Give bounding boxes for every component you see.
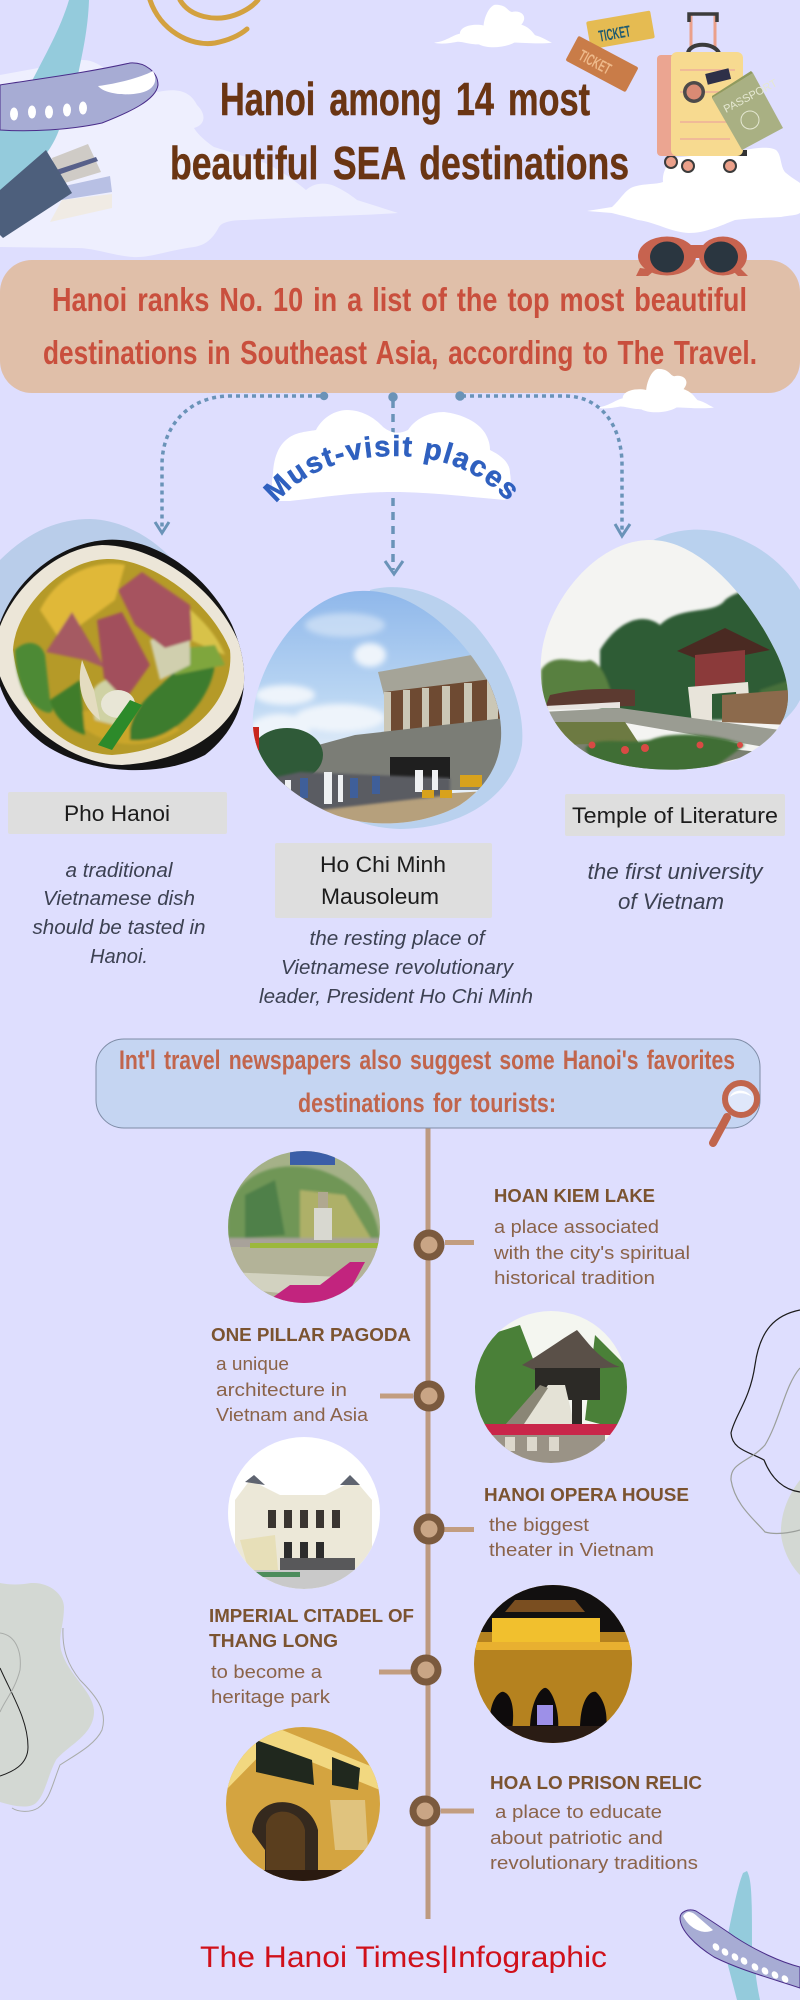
title: beautiful SEA destinations: [170, 137, 629, 189]
text: mausoleum description: leader, President Ho Chi Minh: [259, 986, 533, 1008]
yellow ticket: [586, 10, 655, 49]
dashed arrow centre: [385, 394, 403, 574]
text: Pho Hanoi description: a traditional: [66, 860, 173, 882]
text: Hoan Kiem Lake: a place associated: [494, 1217, 659, 1237]
text: mausoleum description: [259, 928, 533, 1008]
panel: Temple of Literature: [530, 530, 800, 778]
text: Hanoi Opera House: [484, 1485, 689, 1560]
label: Temple of Literature: Temple of Literature: [572, 803, 778, 828]
orange ticket: TICKET: [576, 47, 614, 78]
node: Imperial Citadel: [379, 1654, 442, 1686]
text: Hoan Kiem Lake: with the city's spiritual: [493, 1243, 690, 1263]
plane fuselage: [0, 63, 158, 131]
photo: Hoa Lo Prison: [224, 1725, 384, 1885]
panel: Ho Chi Minh Mausoleum: [245, 585, 522, 835]
text: One Pillar Pagoda: a unique: [216, 1354, 289, 1374]
must-visit cloud: [262, 410, 516, 502]
text: Hoan Kiem Lake: HOAN KIEM LAKE: [494, 1186, 655, 1206]
timeline vertical line: [426, 1128, 430, 1919]
must-visit heading: Must-visit places: [262, 434, 516, 502]
text: Pho Hanoi description: Hanoi.: [90, 946, 148, 968]
plane windows: [10, 102, 87, 120]
text: Hoa Lo Prison Relic: a place to educate: [495, 1802, 662, 1822]
suitcase wheels: [665, 156, 736, 172]
decorative blob left: [0, 1583, 103, 1811]
photo: pho bowl: [0, 536, 255, 776]
footer credit: The Hanoi Times|Infographic: [200, 1941, 607, 1974]
photo: Hoan Kiem Lake: [225, 1148, 385, 1308]
orange ticket: [565, 36, 639, 92]
text: Imperial Citadel: to become a: [211, 1662, 323, 1682]
passport green: [712, 71, 783, 150]
yellow ticket: TICKET: [597, 23, 632, 46]
label: Pho Hanoi: [8, 792, 227, 834]
small white cloud top: [434, 5, 552, 47]
text: Hanoi Opera House: HANOI OPERA HOUSE: [484, 1485, 689, 1505]
text: One Pillar Pagoda: [211, 1325, 411, 1425]
text: One Pillar Pagoda: Vietnam and Asia: [216, 1405, 369, 1425]
plane upper wing: [30, 0, 89, 85]
text: Hanoi Opera House: the biggest: [489, 1515, 589, 1535]
decorative gold swirl: [150, 0, 258, 44]
big white cloud right: [587, 148, 800, 233]
heading bar: destinations for tourists:: [298, 1088, 556, 1118]
photo: mausoleum: [253, 590, 502, 824]
text: temple description: [588, 859, 765, 914]
passport dark: [0, 150, 72, 238]
text: Hoa Lo Prison Relic: about patriotic and: [490, 1828, 663, 1848]
blue blob behind mausoleum: [340, 587, 522, 829]
text: Hoa Lo Prison Relic: HOA LO PRISON RELIC: [490, 1773, 702, 1793]
node: Hoan Kiem Lake: [414, 1230, 474, 1260]
text: mausoleum description: Vietnamese revolutionary: [281, 957, 514, 979]
text: Pho Hanoi description: [32, 860, 206, 968]
label: Ho Chi Minh Mausoleum: Mausoleum: [321, 884, 439, 909]
title: Hanoi among 14 most: [220, 73, 590, 125]
text: Imperial Citadel: IMPERIAL CITADEL OF: [209, 1606, 414, 1626]
plane lower wing: [0, 130, 59, 192]
label: Ho Chi Minh Mausoleum: [275, 843, 492, 918]
text: Pho Hanoi description: Vietnamese dish: [43, 888, 195, 910]
cockpit: [683, 1912, 713, 1932]
plane wing upper: [728, 1871, 752, 1950]
label: Temple of Literature: [565, 794, 785, 836]
suitcase body: [657, 55, 681, 156]
node: Opera House: [414, 1514, 474, 1544]
node: Hoa Lo: [410, 1796, 474, 1826]
icon: magnifier: [713, 1083, 757, 1143]
plane bottom right: [680, 1871, 800, 2000]
heading bar: [96, 1039, 760, 1128]
text: mausoleum description: the resting place of: [310, 928, 487, 950]
ranking banner: [0, 260, 800, 393]
pale cloud behind plane: [0, 60, 398, 257]
photo: temple: [540, 540, 788, 770]
windows: [711, 1942, 790, 1984]
text: temple description: of Vietnam: [618, 889, 724, 914]
text: One Pillar Pagoda: ONE PILLAR PAGODA: [211, 1325, 411, 1345]
plane wing lower: [724, 1950, 760, 2000]
photo: Hanoi Opera House: [225, 1435, 385, 1595]
text: One Pillar Pagoda: architecture in: [216, 1380, 347, 1400]
photo: Imperial Citadel of Thang Long: [470, 1582, 636, 1747]
decorative blob right: [731, 1310, 800, 1575]
text: Imperial Citadel: [209, 1606, 414, 1707]
title: [170, 73, 629, 189]
sticker traveler: [705, 68, 731, 85]
blue blob behind temple: [650, 530, 800, 745]
text: Pho Hanoi description: should be tasted in: [32, 917, 206, 939]
dashed arrow right: [457, 393, 630, 536]
sticker round: [683, 81, 705, 103]
suitcase handle: [691, 15, 715, 50]
sunglasses: [636, 236, 748, 276]
dashed arrow left: [155, 394, 326, 533]
text: temple description: the first university: [588, 859, 765, 884]
node: One Pillar Pagoda: [380, 1380, 444, 1412]
boarding passes: [50, 144, 112, 222]
passport green: PASSPORT: [722, 77, 780, 116]
suitcase: [657, 14, 747, 172]
text: Imperial Citadel: heritage park: [211, 1687, 331, 1707]
label: Ho Chi Minh Mausoleum: Ho Chi Minh: [320, 852, 446, 877]
text: Hanoi Opera House: theater in Vietnam: [489, 1540, 654, 1560]
text: Hoan Kiem Lake: historical tradition: [494, 1268, 655, 1288]
photo: One Pillar Pagoda: [472, 1308, 632, 1468]
plane fuselage: [680, 1910, 800, 1988]
text: Hoa Lo Prison Relic: revolutionary traditions: [490, 1853, 698, 1873]
plane top left: [0, 0, 158, 192]
text: Hoa Lo Prison Relic: [490, 1773, 702, 1873]
blue blob behind pho: [0, 519, 173, 620]
panel: Pho Hanoi: [0, 519, 255, 776]
cockpit window: [98, 71, 155, 94]
label: Pho Hanoi: Pho Hanoi: [64, 801, 170, 826]
text: Hoan Kiem Lake: [493, 1186, 690, 1288]
text: Imperial Citadel: THANG LONG: [209, 1631, 338, 1651]
small cloud on banner: [597, 369, 714, 412]
